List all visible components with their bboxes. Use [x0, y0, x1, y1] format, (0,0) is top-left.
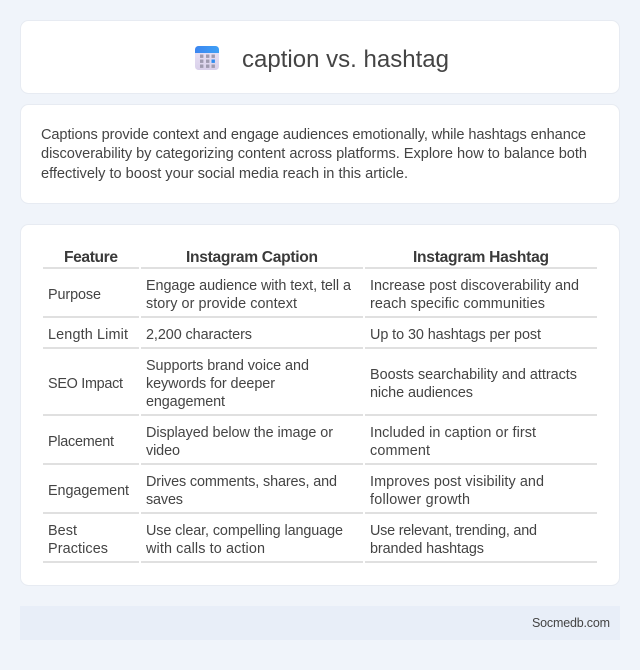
row: purpose: reach specific communities	[370, 296, 545, 312]
footer: Socmedb.com	[532, 616, 610, 630]
row: seo impact: niche audiences	[370, 385, 473, 401]
text block: intro	[41, 127, 587, 182]
row: purpose: Purpose	[48, 287, 101, 303]
row: length limit: 2,200 characters	[146, 327, 252, 343]
row: best practices	[43, 523, 597, 562]
row: best practices: Practices	[48, 541, 108, 557]
title: caption vs. hashtag	[242, 46, 449, 73]
row: placement: comment	[370, 443, 430, 459]
row: length limit	[43, 327, 597, 348]
row: engagement: Improves post visibility and	[370, 474, 544, 490]
row: engagement: follower growth	[370, 492, 470, 508]
footer	[20, 606, 620, 640]
panel: title header	[20, 20, 620, 94]
row: seo impact: SEO Impact	[48, 376, 123, 392]
row: placement: Placement	[48, 434, 114, 450]
row: purpose: Engage audience with text, tell a	[146, 278, 351, 294]
row: length limit: Length Limit	[48, 327, 128, 343]
row: seo impact	[43, 358, 597, 415]
row: placement: Displayed below the image or	[146, 425, 333, 441]
text block: intro: Captions provide context and engage audiences emotionally, while hashtags enhance	[41, 127, 586, 143]
row: placement	[43, 425, 597, 464]
icon: calendar	[195, 46, 219, 70]
row: seo impact: Supports brand voice and	[146, 358, 309, 374]
row: placement: Included in caption or first	[370, 425, 536, 441]
row: placement: video	[146, 443, 180, 459]
row: engagement: Drives comments, shares, and	[146, 474, 337, 490]
row: purpose: Increase post discoverability and	[370, 278, 579, 294]
row: best practices: Best	[48, 523, 77, 539]
row: engagement: Engagement	[48, 483, 129, 499]
row: engagement: saves	[146, 492, 183, 508]
table header: Instagram Hashtag	[413, 249, 549, 266]
row: best practices: branded hashtags	[370, 541, 484, 557]
row: purpose: story or provide context	[146, 296, 297, 312]
row: best practices: Use relevant, trending, and	[370, 523, 537, 539]
row: seo impact: Boosts searchability and attracts	[370, 367, 577, 383]
row: length limit: Up to 30 hashtags per post	[370, 327, 541, 343]
panel: comparison table	[20, 224, 620, 586]
row: seo impact: engagement	[146, 394, 225, 410]
text block: intro: effectively to boost your social media reach in this article.	[41, 166, 408, 182]
row: seo impact: keywords for deeper	[146, 376, 275, 392]
row: best practices: Use clear, compelling language	[146, 523, 343, 539]
table header: Instagram Caption	[186, 249, 318, 266]
panel: introduction	[20, 104, 620, 204]
text block: intro: discoverability by categorizing content across platforms. Explore how to balance both	[41, 146, 587, 162]
row: engagement	[43, 474, 597, 513]
table header	[43, 249, 597, 268]
row: best practices: with calls to action	[145, 541, 265, 557]
table header: Feature	[64, 249, 118, 266]
row: purpose	[43, 278, 597, 317]
